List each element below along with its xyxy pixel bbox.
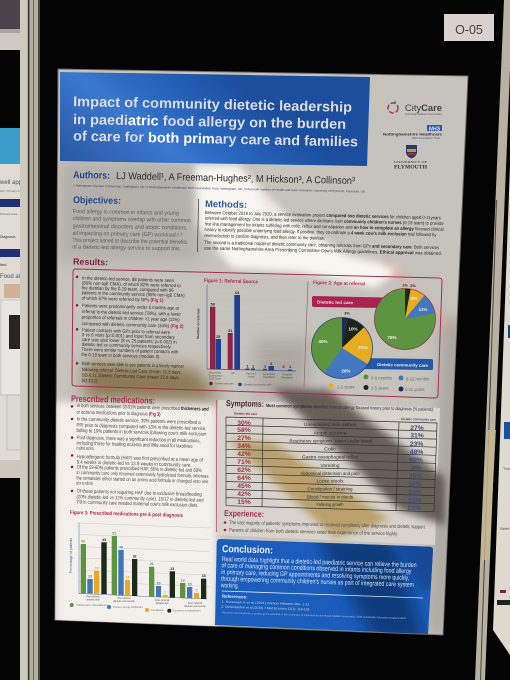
figure 2 legend: 1-2 years: [337, 384, 354, 390]
figure 1 bar chart: referral source: Dietetic community care: [244, 382, 272, 386]
prescribed medications: including those for treating eczema and little need for laxatives: [76, 440, 193, 450]
figure 3 bar chart: prescribed medications: Pre-referral: [117, 596, 131, 600]
objectives: [72, 195, 191, 253]
objectives: This project aimed to describe the potential benefits: [72, 238, 188, 246]
prescribed medications: PPI prior to diagnosis compared with 13% in the dietetic-led service,: [76, 422, 207, 432]
objectives: all impacting on primary care (GP) workload.¹˒²: [72, 231, 183, 239]
pie: dietetic led care: 2%: [410, 284, 416, 288]
figure 3 bar chart: prescribed medications: 2: [164, 590, 166, 594]
prescribed medications: [70, 394, 209, 509]
results bullet points: There were similar numbers of patient contacts with: [81, 347, 179, 355]
methods: The second is a traditional model of dietetic community care, obtaining referrals from GPs and secondary care. Both services: [204, 240, 440, 250]
results bullet points: proportion of referrals in children >1 year age (11%): [82, 314, 180, 322]
prescribed medications: Of the 59-60% patients prescribed HAF, 66% in dietetic-led and 68%: [77, 465, 202, 474]
prescribed medications: in either service.: [76, 445, 95, 452]
figure 2 legend: [328, 374, 429, 392]
results bullet points: care was also lower (8 vs 25 patients; p=0.002) in: [82, 337, 177, 345]
references: 1. Sorensen K et al (2021) Immun Inflamm Dis. 1-11: [222, 600, 310, 606]
results bullet points: [75, 275, 185, 386]
symptoms table: 45%: [237, 483, 251, 490]
conclusion panel: Conclusion:: [222, 544, 273, 556]
pie: dietetic community care: 21%: [358, 345, 368, 350]
right metal pole: [475, 0, 510, 680]
prescribed medications: Post diagnosis, there was a significant reduction in all medications,: [77, 435, 201, 444]
prescribed medications: the remainder either started on an amino acid formula or changed onto one: [76, 475, 209, 485]
conclusion panel: through empowering community children's nurses as part of integrated care system: [221, 576, 414, 589]
symptoms table: 31%: [410, 432, 424, 440]
poster title: Impact of community dietetic leadership: [73, 93, 352, 115]
symptoms table: Colic: [324, 446, 337, 452]
figure 3 bar chart: prescribed medications: Figure 3: Prescribed medications pre & post diagnosis: [70, 510, 183, 519]
figure 2 pie charts: age at referral: Figure 2: Age at referral: [313, 280, 365, 287]
symptoms table: 62%: [237, 467, 251, 474]
results bullet points: referral to the dietetic-led service (78%), with a lower: [82, 309, 181, 317]
methods: use the same Nottinghamshire Area Prescribing Committee Cow's Milk Allergy guidelines. Ethical approval was obtained.: [204, 245, 442, 256]
symptoms table: Vomiting: [320, 463, 340, 468]
logo: NHS Nottinghamshire Healthcare: NHS Foundation Trust: [412, 136, 440, 140]
figure 1 bar chart: referral source: 53: [210, 302, 215, 306]
objectives: Food allergy is common in infants and young: [73, 209, 179, 217]
pie: dietetic community care: [312, 312, 373, 379]
symptoms table: Constipation / straining: [308, 486, 353, 492]
label band: dietetic community care: Dietetic community care: [377, 362, 429, 368]
figure 3 bar chart: prescribed medications: Thickeners / Emollients: [76, 603, 108, 607]
poster title: of care for both primary care and families: [73, 128, 358, 149]
figure 1 bar chart: referral source: Paediatric: [263, 375, 275, 379]
symptoms table: 23%: [407, 505, 421, 512]
authors: 1 Nottingham CityCare Partnership, Nottingham, UK; 2 Nottinghamshire Healthcare NHS Foundation Trust, Nottingham, UK; 3 Plymouth Institute of Health and Care Research, University of Plymouth, Plymouth, UK: [73, 184, 365, 194]
prescribed medications: 9.4 weeks in dietetic-led vs 13.9 weeks in community care.: [77, 459, 192, 469]
objectives: of a dietetic-led allergy service to support this.: [72, 244, 182, 252]
symptoms table: 34%: [237, 443, 251, 450]
logo: CityCare: CityCare: [405, 103, 442, 113]
prescribed medications: falling to 10% patients in both services following cow's milk exclusion: [76, 428, 207, 438]
references: This work was funded by a project grant awarded to the University of Plymouth by the Royal Dietetic Association, BDA and Health Education England 2022: [221, 611, 407, 620]
symptoms table: Atopic eczema: [314, 430, 347, 436]
left neighbouring poster: Diagnosis: [0, 235, 16, 239]
figure 2 legend: 2-5 years: [371, 386, 388, 390]
figure 1 bar chart: referral source: Number of referrals: [196, 308, 201, 339]
figure 3 bar chart: prescribed medications: Laxatives: [151, 608, 164, 612]
pie: dietetic community care: 10%: [348, 326, 358, 332]
objectives: Objectives:: [73, 195, 121, 207]
experience: Parents of children from both dietetic services rated their experience of the service highly.: [229, 528, 398, 537]
figure 3 bar chart: prescribed medications: 13: [181, 578, 185, 582]
symptoms table: 42%: [237, 451, 251, 458]
figure 1 bar chart: referral source: [196, 278, 298, 386]
prescribed medications: In the community dietetic service, 39% patients were prescribed a: [77, 417, 201, 426]
right neighbouring poster: [493, 165, 510, 655]
figure 3 bar chart: prescribed medications: 19: [95, 566, 99, 570]
prescribed medications: Of those patients not requiring HAF due to exclusive breastfeeding: [77, 489, 202, 498]
figure 3 bar chart: prescribed medications: 26: [150, 562, 154, 566]
figure 3 bar chart: prescribed medications: 10: [156, 582, 160, 586]
right neighbouring poster: The: [503, 466, 510, 471]
symptoms table: 42%: [237, 491, 251, 498]
authors: Authors:: [73, 170, 110, 182]
figure 3 bar chart: prescribed medications: 23: [170, 567, 174, 571]
logo: NHS Nottinghamshire Healthcare: [383, 125, 443, 140]
references: References:: [222, 594, 248, 600]
figure 1 bar chart: referral source: Secondary: [263, 372, 276, 376]
symptoms table: 30%: [237, 420, 251, 427]
figure 1 bar chart: referral source: Dietetic led care: [215, 382, 234, 386]
symptoms heading: [226, 398, 436, 422]
divider: objectives and methods: [198, 199, 199, 252]
symptoms table: 27%: [410, 425, 424, 432]
symptoms table: 60%: [409, 457, 423, 464]
results bullet points: Patients were predominantly under 6 months age at: [82, 303, 180, 311]
results bullet points: SD 6.1). Dietetic Community Care (mean 22.8 days,: [82, 372, 180, 380]
figure 1 bar chart: referral source: 0: [282, 365, 285, 369]
figure 3 bar chart: prescribed medications: 32: [133, 554, 137, 558]
figure 3 bar chart: prescribed medications: Percentage of patients: [69, 538, 73, 573]
prescribed medications: prior to referral.: [76, 480, 93, 487]
figure 1 bar chart: referral source: 1: [264, 364, 266, 368]
figure 2 legend: 0-6 months: [371, 376, 392, 380]
methods: first line management for infants suffering with colic, reflux and constipation and on how to complete an allergy focused clinical: [205, 221, 444, 232]
figure 3 bar chart: prescribed medications: 18: [202, 574, 206, 578]
figure 2 legend: 5-11 years: [405, 387, 424, 392]
results bullet points: (80% non-IgE CMA), of which 82% were referred to: [82, 280, 181, 288]
results heading: Results:: [73, 257, 108, 267]
symptoms heading: Most common symptoms identified from an allergy focused history prior to diagnosis (% patients): [266, 403, 433, 412]
symptoms table: 64%: [237, 475, 251, 482]
symptoms heading: Dietetic-led care: [234, 412, 257, 416]
figure 3 bar chart: prescribed medications: 10: [188, 582, 192, 586]
prescribed medications: Prescribed medications:: [71, 394, 155, 406]
poster title: [73, 93, 358, 149]
left metal pole: [20, 0, 40, 680]
symptoms table: Loose stools: [316, 478, 344, 484]
figure 3 bar chart: prescribed medications: Eczema medications: [173, 609, 201, 613]
methods: Between October 2019 to July 2020, a service evaluation project compared two dietetic services for children aged 0-11years: [205, 210, 442, 220]
conclusion panel: Real world data highlight that a dietetic-led paediatric service can relieve the burden: [222, 556, 417, 569]
experience: [224, 508, 426, 537]
pie: dietetic led care: 8%: [411, 296, 417, 301]
symptoms table: 15%: [237, 499, 251, 506]
figure 3 bar chart: prescribed medications: [69, 510, 210, 613]
figure 2 legend: 6-12 months: [406, 376, 429, 382]
pie: dietetic community care: 26%: [341, 368, 351, 374]
right neighbouring poster: Refer: [500, 526, 510, 531]
figure 1 bar chart: referral source: 25: [216, 335, 220, 339]
pie: dietetic led care: [374, 284, 436, 350]
header banner: [60, 72, 370, 166]
experience: Experience:: [224, 508, 264, 519]
figure 1 bar chart: referral source: Parents/: [246, 372, 256, 376]
label band: dietetic led care: Dietetic led care: [317, 300, 354, 305]
figure 1 bar chart: referral source: 1: [252, 364, 254, 368]
figure 3 bar chart: prescribed medications: 13: [88, 574, 92, 578]
figure 3 bar chart: prescribed medications: 42: [81, 540, 85, 544]
figure 3 bar chart: prescribed medications: 43: [102, 538, 106, 542]
methods: referred with food allergy. One is a dietetic-led service where dietitians train community children's nurses (0-19 team) to provide: [205, 216, 444, 226]
figure 3 bar chart: prescribed medications: Post-referral: [155, 598, 170, 602]
figure 1 bar chart: referral source: 1: [246, 364, 249, 368]
symptoms table: 8%: [411, 465, 421, 472]
results bullet points: In the dietetic-led service, 88 patients were seen: [82, 276, 174, 283]
methods: reintroduction to confirm diagnosis, and then refer to the dietitian.: [204, 233, 325, 241]
figure 2 pie charts: age at referral: [312, 280, 436, 392]
results bullet points: Patient contacts with GPs prior to referral were: [82, 328, 170, 335]
figure 1 bar chart: referral source: 4: [270, 362, 273, 366]
figure 1 bar chart: referral source: 31: [228, 329, 232, 333]
symptoms table: 15%: [408, 498, 421, 504]
logo: University of Plymouth: UNIVERSITY OF: [394, 160, 427, 164]
prescribed medications: or eczema medications prior to diagnosis (Fig 3): [76, 409, 161, 418]
symptoms table: Faltering growth: [316, 502, 344, 507]
results bullet points: following referral: Dietetic-Led Care (mean: 11.8 days,: [82, 367, 182, 375]
methods: [204, 199, 445, 256]
methods: Methods:: [205, 199, 247, 211]
divider: left and right columns: [215, 400, 218, 532]
logo: CityCare: Improving Healthier Communities: [405, 113, 443, 116]
logo: University of Plymouth: PLYMOUTH: [394, 164, 428, 170]
symptoms table: 35%: [409, 473, 422, 480]
figure 3 bar chart: prescribed medications: Proton pump inhibitors: [113, 605, 144, 609]
figure 1 bar chart: referral source: Hospital: [282, 372, 292, 376]
divider: figure 1 and figure 2: [304, 281, 308, 387]
logo: NHS Nottinghamshire Healthcare: Nottinghamshire Healthcare: [383, 132, 443, 136]
results bullet points: of which 67% were referred by GPs (Fig 1): [81, 295, 164, 303]
results bullet points: the 0-19 team in both services (median 3): [81, 352, 160, 359]
results bullet points: compared with dietetic community care (34%) (Fig 2): [81, 321, 184, 329]
pie: dietetic led care: 78%: [387, 335, 397, 340]
prescribed medications: Hypoallergenic formula (HAF) was first prescribed at a mean age of: [77, 454, 203, 464]
results bullet points: SD 13.1): [81, 378, 98, 383]
authors: [73, 170, 365, 194]
conclusion panel: of care of managing common conditions observed in infants including food allergy: [221, 562, 412, 575]
conclusion panel: [215, 539, 433, 634]
objectives: gastrointestinal disorders and atopic conditions,: [73, 223, 188, 232]
prescribed medications: in community care only received extensively hydrolysed formula, whereas: [76, 470, 209, 480]
figure 3 bar chart: prescribed medications: dietetic community: [184, 604, 206, 608]
figure 3 bar chart: prescribed medications: dietetic-led: [156, 601, 169, 605]
figure 3 bar chart: prescribed medications: Pre-referral: [86, 594, 100, 598]
symptoms table: 27%: [237, 435, 251, 442]
prescribed medications: (20% dietetic-led vs 11% community care), 15/17 in dietetic-led and: [76, 494, 204, 504]
poster title: in paediatric food allergy on the burden: [73, 111, 346, 132]
figure 1 bar chart: referral source: 1: [289, 365, 291, 369]
left neighbouring poster: AKI, Primary Care: [0, 189, 25, 193]
symptoms table: 50%: [408, 481, 422, 488]
figure 3 bar chart: prescribed medications: dietetic community: [113, 599, 135, 603]
figure 3 bar chart: prescribed medications: 51: [112, 532, 116, 536]
left neighbouring poster: well appro: [0, 180, 28, 186]
prescribed medications: In both services, between 33-51% patients were prescribed thickeners and: [77, 403, 209, 413]
symptoms table: 58%: [237, 427, 251, 434]
results bullet points: patients in the community service (95% non-IgE CMA): [82, 290, 185, 298]
symptoms table: Blood / mucus in stools: [307, 494, 354, 500]
figure 1 bar chart: referral source: 0-19 Team: [209, 376, 221, 380]
figure 1 bar chart: referral source: GP: [231, 371, 235, 375]
logo: CityCare: [388, 101, 443, 116]
pie: dietetic community care: 3%: [344, 312, 350, 316]
symptoms table: Abdominal distension and pain: [300, 471, 360, 476]
objectives: children and symptoms overlap with other common: [73, 216, 191, 224]
figure 1 bar chart: referral source: Community: [208, 374, 222, 378]
figure 3 bar chart: prescribed medications: Post-referral: [188, 601, 203, 605]
figure 3 bar chart: prescribed medications: dietetic-led: [87, 598, 100, 602]
figure 3 bar chart: prescribed medications: 39: [119, 546, 123, 550]
left neighbouring poster: Primary Care: [0, 212, 18, 216]
methods: history to identify possible underlying food allergy. If positive, they co-ordinate a 4 week cow's milk exclusion trial followed by: [204, 227, 437, 237]
logo: University of Plymouth: [394, 145, 428, 170]
symptoms table: 23%: [410, 441, 423, 448]
pie: dietetic led care: 1%: [402, 284, 408, 288]
figure 1 bar chart: referral source: Figure 1: Referral Source: [204, 278, 258, 285]
results bullet points: the dietitian by the 0-19 team, compared with 96: [82, 285, 174, 293]
experience: The vast majority of patients' symptoms improved or resolved completely after diagnosis and dietetic support.: [229, 520, 426, 530]
symptoms table: Gastro-oesophageal reflux: [302, 454, 359, 460]
symptoms table: [226, 417, 437, 512]
symptoms table: Respiratory symptoms (upper and/or lower): [290, 438, 373, 444]
references: 2. Diefenbacher et al (2019) J Med Econom 12(1): 119-126: [221, 605, 310, 611]
figure 1 bar chart: referral source: Nurse: [248, 374, 255, 378]
results bullet points: 3 vs 6 visits (p=0.001) and input from secondary: [82, 332, 176, 340]
poster sheet: [55, 69, 470, 635]
authors: LJ Waddell¹, A Freeman-Hughes², M Hickson³, A Collinson³: [116, 171, 356, 187]
pie: dietetic community care: 40%: [318, 339, 328, 344]
references: [221, 594, 407, 620]
symptoms heading: Symptoms:: [226, 398, 264, 409]
symptoms table: Unexplained skin rashes: [304, 422, 357, 427]
symptoms table: 23%: [408, 489, 422, 496]
results panel: [72, 269, 442, 398]
results bullet points: Both services were able to see patients in a timely manner: [82, 361, 184, 369]
symptoms heading: Dietetic community care: [401, 417, 436, 422]
symptoms table: 71%: [237, 459, 251, 466]
results bullet points: dietetic-led vs community services respectively.: [82, 342, 172, 349]
logo: NHS Nottinghamshire Healthcare: NHS: [429, 126, 441, 132]
figure 3 bar chart: prescribed medications: 5: [196, 588, 198, 592]
figure 1 bar chart: referral source: Paediatric: [281, 376, 293, 380]
left neighbouring poster: ited: [0, 262, 6, 267]
conclusion panel: in primary care, reducing GP appointments and resolving symptoms more quickly,: [221, 569, 410, 582]
poster number tag: O-05: [455, 23, 483, 37]
prescribed medications: 7/9 in community care needed maternal cow's milk exclusion diets.: [76, 499, 198, 509]
left neighbouring poster: Food aller: [0, 274, 27, 280]
figure 1 bar chart: referral source: Secondary: [209, 370, 222, 374]
figure 1 bar chart: referral source: 64: [235, 291, 240, 295]
symptoms table: 48%: [410, 449, 423, 456]
left neighbouring poster: [0, 0, 20, 478]
poster number tag: [444, 14, 494, 41]
pie: dietetic led care: 11%: [419, 307, 427, 312]
figure 3 bar chart: prescribed medications: 14: [126, 576, 130, 580]
conclusion panel: working.: [220, 582, 239, 590]
